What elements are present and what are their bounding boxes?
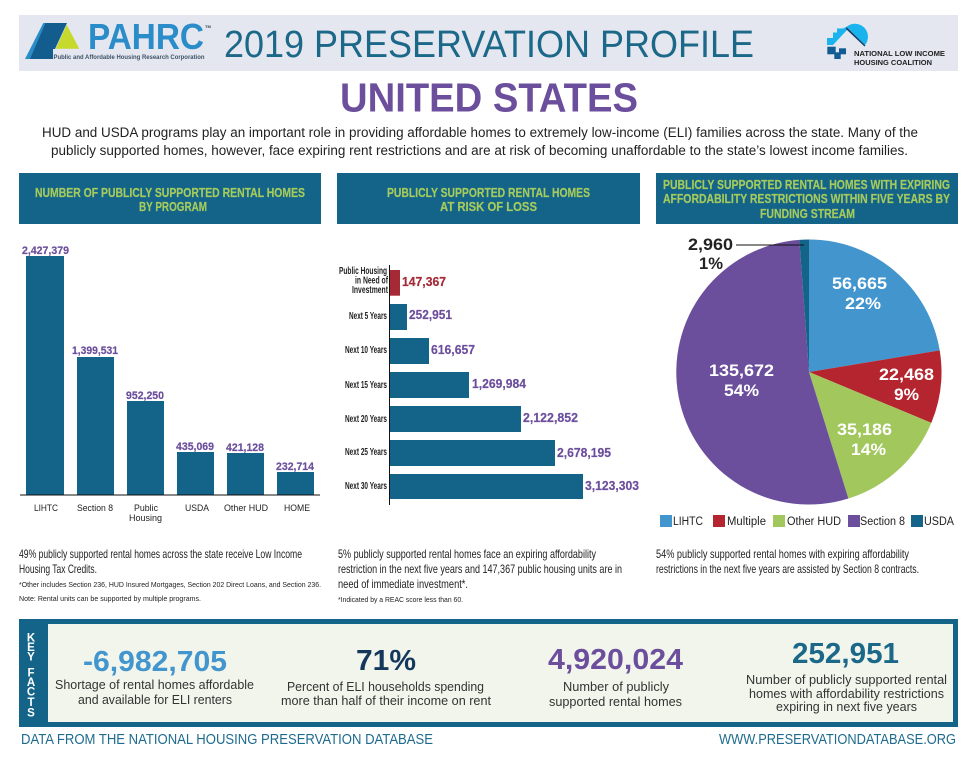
bar chart: homes by program: Public [134, 503, 158, 513]
bar chart: homes at risk of loss: Next 5 Years [349, 310, 387, 322]
note: program chart: 49% publicly supported rental homes across the state receive Low Income [19, 547, 302, 561]
fact: cost burden [281, 645, 491, 708]
fact: shortage: Shortage of rental homes affordable [55, 677, 254, 692]
pie legend: Other HUD [787, 516, 841, 528]
logo: PAHRC: PAHRC [88, 16, 204, 57]
note: at-risk chart: restriction in the next five years and 147,367 public housing units are in [338, 562, 622, 576]
note: program chart: Housing Tax Credits. [19, 562, 97, 576]
bar chart: homes at risk of loss: Public Housing [339, 265, 387, 277]
bar chart: homes at risk of loss: Next 30 Years [345, 480, 387, 492]
key facts vertical label: A [27, 677, 35, 689]
bar chart: homes at risk of loss: 616,657 [431, 343, 475, 357]
intro paragraph: HUD and USDA programs play an important role in providing affordable homes to extremely low-income (ELI) families across the state. Many of the [42, 125, 918, 140]
bar chart: homes by program: 952,250 [126, 390, 164, 402]
pie chart: funding stream: 2,960 [688, 235, 733, 254]
bar chart: homes by program: USDA [185, 503, 209, 513]
panel heading: homes at risk of loss: PUBLICLY SUPPORTED RENTAL HOMES [387, 185, 590, 200]
note: program chart [19, 547, 321, 603]
title: 2019 PRESERVATION PROFILE [224, 24, 754, 66]
pie chart: funding stream: 9% [894, 385, 919, 404]
fact: supported homes: Number of publicly [563, 679, 669, 694]
pie chart: funding stream: 14% [851, 440, 886, 459]
panel heading: expiring restrictions by funding stream [656, 173, 958, 224]
key facts vertical label: K [27, 632, 36, 644]
fact: cost burden: 71% [356, 645, 416, 677]
panel heading: rental homes by program: NUMBER OF PUBLICLY SUPPORTED RENTAL HOMES [35, 185, 305, 200]
panel heading: homes at risk of loss [337, 173, 640, 224]
intro paragraph: publicly supported homes, however, face expiring rent restrictions and are at risk of becoming unaffordable to the state’s lowest income families. [51, 143, 908, 158]
logo: National Low Income Housing Coalition: NATIONAL LOW INCOME [854, 49, 945, 58]
bar chart: homes by program [20, 245, 320, 523]
fact: supported homes [548, 644, 683, 709]
panel heading: rental homes by program: BY PROGRAM [139, 199, 207, 214]
panel: key facts [19, 619, 958, 727]
bar chart: homes at risk of loss: 3,123,303 [585, 479, 639, 493]
note: program chart: Note: Rental units can be supported by multiple programs. [19, 594, 201, 603]
key facts vertical label: T [27, 697, 35, 709]
pie legend: Multiple [727, 516, 766, 528]
bar chart: homes by program: Housing [129, 513, 162, 523]
bar chart: homes by program: HOME [284, 503, 310, 513]
pie chart: funding stream: 22% [845, 294, 881, 313]
fact: shortage [55, 646, 254, 707]
bar chart: homes at risk of loss: Next 15 Years [345, 379, 387, 391]
bar chart: homes by program: 421,128 [226, 442, 264, 454]
pie legend: LIHTC [673, 516, 703, 528]
bar chart: homes at risk of loss: 147,367 [402, 275, 446, 289]
fact: supported homes: supported rental homes [549, 694, 682, 709]
bar chart: homes at risk of loss: 252,951 [409, 308, 452, 322]
bar chart: homes at risk of loss: Next 10 Years [345, 344, 387, 356]
heading: United States: UNITED STATES [340, 74, 638, 120]
logo: National Low Income Housing Coalition [827, 24, 945, 67]
logo: PAHRC [25, 16, 211, 61]
panel heading: expiring restrictions by funding stream: FUNDING STREAM [760, 206, 855, 221]
pie chart: funding stream: 54% [724, 381, 759, 400]
intro paragraph [42, 125, 918, 158]
fact: cost burden: Percent of ELI households spending [287, 679, 484, 694]
footer: data source: DATA FROM THE NATIONAL HOUSING PRESERVATION DATABASE [21, 731, 433, 748]
note: program chart: *Other includes Section 236, HUD Insured Mortgages, Section 202 Direct Loans, and Section 236. [19, 580, 321, 589]
pie chart: funding stream [676, 235, 941, 505]
bar chart: homes by program: Section 8 [77, 503, 113, 513]
pie chart: funding stream: 56,665 [832, 274, 887, 293]
key facts vertical label: Y [27, 652, 35, 664]
key facts vertical label: C [27, 686, 35, 698]
fact: expiring homes: expiring in next five years [776, 699, 917, 714]
bar chart: homes at risk of loss: Next 25 Years [345, 446, 387, 458]
note: at-risk chart: need of immediate investment*. [338, 577, 468, 591]
bar chart: homes by program: 232,714 [276, 461, 315, 473]
key facts vertical label: F [27, 668, 35, 680]
bar chart: homes at risk of loss: in Need of [355, 274, 388, 286]
logo: PAHRC: Public and Affordable Housing Research Corporation [54, 54, 205, 61]
pie chart: funding stream: 22,468 [879, 365, 934, 384]
panel heading: homes at risk of loss: AT RISK OF LOSS [440, 199, 537, 214]
bar chart: homes by program: 435,069 [176, 441, 214, 453]
pie chart: funding stream: 135,672 [709, 361, 774, 380]
bar chart: homes at risk of loss: 2,678,195 [557, 446, 611, 460]
pie legend: Section 8 [860, 516, 905, 528]
bar chart: homes at risk of loss: 1,269,984 [472, 377, 526, 391]
bar chart: homes by program: LIHTC [34, 503, 58, 513]
note: pie chart [656, 547, 919, 576]
pie legend: USDA [924, 516, 954, 528]
fact: expiring homes: Number of publicly supported rental [746, 672, 947, 687]
bar chart: homes by program: 1,399,531 [72, 345, 118, 357]
header band [19, 15, 958, 71]
note: at-risk chart: 5% publicly supported rental homes face an expiring affordability [338, 547, 596, 561]
key facts vertical label: S [27, 708, 35, 720]
fact: expiring homes [746, 638, 947, 714]
fact: expiring homes: homes with affordability restrictions [749, 686, 944, 701]
fact: cost burden: more than half of their income on rent [281, 693, 491, 708]
bar chart: homes by program: 2,427,379 [22, 245, 69, 257]
bar chart: homes at risk of loss: Next 20 Years [345, 413, 387, 425]
bar chart: homes at risk of loss [339, 265, 639, 505]
fact: supported homes: 4,920,024 [548, 644, 683, 676]
bar chart: homes by program: Other HUD [224, 503, 268, 513]
fact: expiring homes: 252,951 [792, 638, 899, 670]
pie legend [660, 515, 954, 528]
fact: shortage: -6,982,705 [83, 646, 227, 678]
panel heading: rental homes by program [19, 173, 321, 224]
pie chart: funding stream: 35,186 [837, 420, 892, 439]
bar chart: homes at risk of loss: 2,122,852 [523, 411, 578, 425]
logo: National Low Income Housing Coalition: HOUSING COALITION [854, 58, 932, 67]
note: at-risk chart: *Indicated by a REAC score less than 60. [338, 595, 463, 604]
fact: shortage: and available for ELI renters [78, 692, 232, 707]
bar chart: homes at risk of loss: Investment [352, 284, 388, 296]
logo: PAHRC: TM [205, 24, 211, 29]
key facts vertical label: E [27, 642, 35, 654]
note: at-risk chart [338, 547, 622, 604]
pie chart: funding stream: 1% [699, 254, 723, 273]
